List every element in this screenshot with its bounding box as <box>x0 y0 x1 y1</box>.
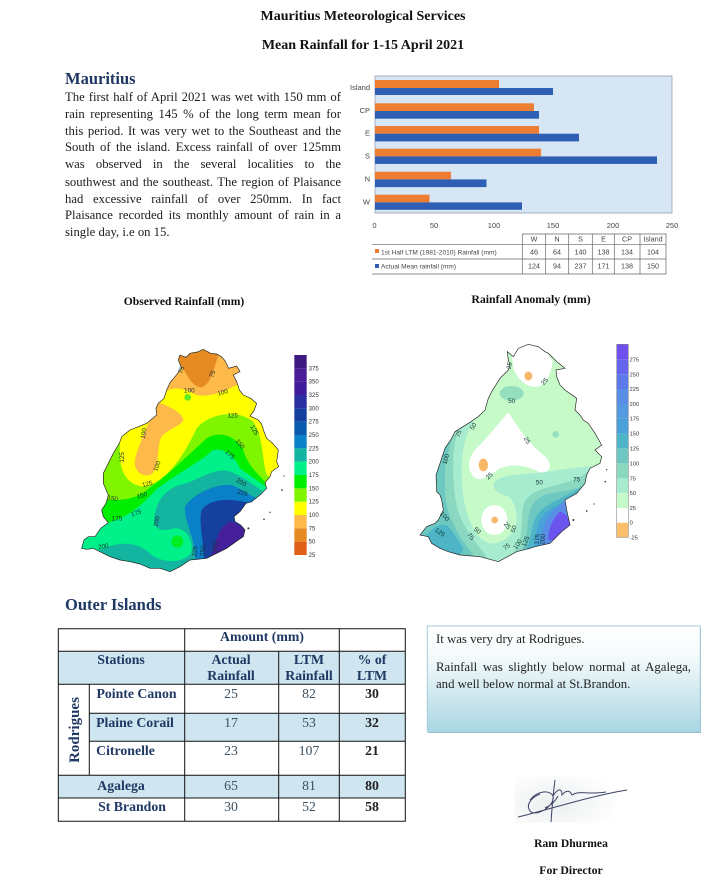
data table under bar chart: S <box>578 234 583 244</box>
contour labels: 125 <box>119 452 126 463</box>
row: Citronelle: 107 <box>299 743 319 758</box>
legend: anomaly colour bar: -25 <box>630 535 638 541</box>
contour labels: 100 <box>442 453 451 465</box>
legend: observed rainfall colour bar: 275 <box>309 420 319 426</box>
contour labels: 50 <box>536 479 543 486</box>
contour labels: 225 <box>237 489 249 498</box>
contour labels: 100 <box>152 460 163 472</box>
legend: anomaly colour bar: 250 <box>630 372 639 378</box>
text block: Mauritius summary: was observed in the several localities to the <box>65 157 341 171</box>
row: St Brandon: 58 <box>365 799 379 814</box>
value axis labels: 50 <box>430 221 438 230</box>
legend: observed rainfall colour bar: 225 <box>309 446 319 452</box>
contour labels: 75 <box>177 365 186 375</box>
row: Agalega: 80 <box>365 778 379 793</box>
row: Pointe Canon: 82 <box>302 686 316 701</box>
contour labels: 25 <box>506 361 514 370</box>
data table under bar chart: 124 <box>528 262 540 270</box>
data table under bar chart: E <box>601 234 606 244</box>
bars: W <box>375 195 522 210</box>
legend: anomaly colour bar: 150 <box>630 432 639 438</box>
contour labels: 75 <box>573 477 581 484</box>
bars: N <box>375 172 486 187</box>
data table under bar chart: 150 <box>647 262 659 270</box>
legend: anomaly colour bar: 100 <box>630 461 639 467</box>
row: Plaine Corail: 17 <box>224 715 238 730</box>
contour labels: 50 <box>510 524 519 534</box>
data table under bar chart: 171 <box>598 262 610 270</box>
value axis labels: 200 <box>607 221 619 230</box>
contour labels: 25 <box>540 376 550 387</box>
signature <box>515 775 627 823</box>
row: Citronelle: Citronelle <box>96 743 155 758</box>
text block: Mauritius summary: South of the island. Excess rainfall of over 125mm <box>65 140 341 154</box>
row: St Brandon: 52 <box>302 799 316 814</box>
contour labels: 250 <box>199 545 207 556</box>
contour labels: 25 <box>485 471 495 481</box>
column headers: Rainfall <box>285 668 333 683</box>
contour labels: 25 <box>502 521 512 531</box>
signatory role: For Director <box>539 863 603 877</box>
contour labels: 125 <box>227 412 238 419</box>
column headers: LTM <box>294 652 324 667</box>
contour labels: 75 <box>502 542 512 552</box>
contour labels: 200 <box>235 477 248 489</box>
bars: CP <box>375 103 539 119</box>
row: St Brandon <box>98 799 379 814</box>
row: Plaine Corail <box>96 715 379 730</box>
bars: E <box>375 126 579 141</box>
map: rainfall anomaly <box>420 335 607 575</box>
category axis labels: S <box>365 152 370 160</box>
data table under bar chart: Island <box>643 234 663 244</box>
title: organisation: Mauritius Meteorological Services <box>260 9 466 24</box>
legend: observed rainfall colour bar: 300 <box>309 406 319 412</box>
row: St Brandon: St Brandon <box>98 799 166 814</box>
data table under bar chart: 104 <box>647 248 659 256</box>
legend: observed rainfall colour bar: 100 <box>309 513 319 519</box>
contour labels: 150 <box>107 494 119 503</box>
row: Agalega: Agalega <box>97 778 145 793</box>
text block: outer islands summary <box>436 632 691 691</box>
text block: Mauritius summary: Plaisance recorded its monthly amount of rain in a <box>65 208 341 222</box>
category axis labels <box>350 83 371 206</box>
map: observed rainfall <box>80 340 287 580</box>
column headers <box>97 629 387 683</box>
row: St Brandon: 30 <box>224 799 238 814</box>
value axis labels: 100 <box>488 221 500 230</box>
legend: anomaly colour bar: 200 <box>630 402 639 408</box>
contour labels: 25 <box>522 436 532 446</box>
data table under bar chart: 138 <box>598 248 610 256</box>
data table under bar chart: 64 <box>553 248 561 256</box>
value axis labels: 150 <box>547 221 559 230</box>
legend: observed rainfall colour bar: 375 <box>309 366 319 372</box>
contour labels: 50 <box>472 526 482 536</box>
row: Pointe Canon: 30 <box>365 686 379 701</box>
contour labels: 150 <box>136 491 149 501</box>
data table under bar chart: 134 <box>621 248 633 256</box>
contour labels: 100 <box>140 427 149 439</box>
contour labels: 125 <box>141 480 154 489</box>
row: Agalega <box>97 778 379 793</box>
data table under bar chart <box>372 234 666 274</box>
legend: observed rainfall colour bar: 350 <box>309 380 319 386</box>
legend: observed rainfall colour bar: 125 <box>309 500 319 506</box>
contour labels: 125 <box>248 424 260 437</box>
data table under bar chart: W <box>531 234 538 244</box>
column headers: Rainfall <box>207 668 255 683</box>
category axis labels: E <box>365 128 370 138</box>
legend: observed rainfall colour bar: 150 <box>309 486 319 492</box>
contour labels: 75 <box>455 429 464 438</box>
contour labels: 200 <box>539 533 547 545</box>
legend: observed rainfall colour bar: 175 <box>309 473 319 479</box>
category axis labels: CP <box>360 106 370 115</box>
row: Citronelle: 21 <box>365 743 379 758</box>
value axis labels <box>372 221 678 230</box>
heading: Outer Islands: Outer Islands <box>65 595 162 614</box>
text block: Mauritius summary: rain representing 145 % of the long term mean for <box>65 107 341 121</box>
row: Plaine Corail: 32 <box>365 715 379 730</box>
contour labels <box>98 365 260 557</box>
row: Plaine Corail: Plaine Corail <box>96 715 174 730</box>
text block: Mauritius summary: southwest and the southeast. The region of Plaisance <box>65 175 341 189</box>
bars: Island <box>375 80 553 95</box>
contour labels: 225 <box>192 545 199 557</box>
text block: Mauritius summary <box>65 90 341 239</box>
contour labels: 50 <box>469 421 479 431</box>
contour labels: 175 <box>223 449 236 462</box>
text block: Mauritius summary: this period. It was very wet to the Southeast and the <box>65 124 341 138</box>
text block: Mauritius summary: had excessive rainfall of over 250mm. In fact <box>65 192 341 206</box>
data table under bar chart: 94 <box>553 262 561 270</box>
column headers: Amount (mm) <box>220 629 304 645</box>
data table under bar chart: 140 <box>574 248 586 256</box>
legend: observed rainfall colour bar <box>294 355 319 559</box>
value axis labels: 0 <box>372 221 377 230</box>
legend: anomaly colour bar: 125 <box>630 446 639 452</box>
column headers: % of <box>358 652 387 667</box>
column headers: Actual <box>211 652 251 667</box>
legend: anomaly colour bar: 25 <box>630 506 636 512</box>
heading: Mauritius: Mauritius <box>65 69 136 88</box>
legend: observed rainfall colour bar: 50 <box>309 540 316 546</box>
signatory name: Ram Dhurmea <box>534 837 608 850</box>
row: Pointe Canon: Pointe Canon <box>96 686 177 701</box>
column headers: LTM <box>357 668 387 683</box>
table: outer islands rainfall <box>58 629 405 821</box>
row: Agalega: 81 <box>302 778 316 793</box>
title: report period: Mean Rainfall for 1-15 April 2021 <box>262 38 464 53</box>
text block: Mauritius summary: single day, i.e on 15. <box>65 225 170 239</box>
callout box background <box>427 626 701 733</box>
column headers: Stations <box>97 652 145 667</box>
legend: anomaly colour bar: 50 <box>630 491 636 497</box>
legend: anomaly colour bar: 175 <box>630 417 639 423</box>
text block: outer islands summary: and well below normal at St.Brandon. <box>436 677 630 691</box>
text block: Mauritius summary: The first half of April 2021 was wet with 150 mm of <box>65 90 341 104</box>
contour labels: 175 <box>534 533 541 545</box>
row: Agalega: 65 <box>224 778 238 793</box>
contour labels: 125 <box>521 535 531 548</box>
value axis labels: 250 <box>666 221 678 230</box>
contour labels: 75 <box>465 532 476 542</box>
legend: anomaly colour bar: 0 <box>630 521 633 527</box>
contour labels: 100 <box>217 388 229 398</box>
heading: Observed Rainfall: Observed Rainfall (mm) <box>124 295 244 308</box>
contour labels: 275 <box>212 541 220 553</box>
row: Citronelle <box>96 743 379 758</box>
bar chart: rainfall by region <box>350 76 678 230</box>
contour labels: 75 <box>208 369 217 379</box>
row: Citronelle: 23 <box>224 743 238 758</box>
data table under bar chart: N <box>554 234 560 244</box>
row label: Rodrigues: Rodrigues <box>67 697 83 763</box>
legend: observed rainfall colour bar: 250 <box>309 433 319 439</box>
text block: outer islands summary: Rainfall was slightly below normal at Agalega, <box>436 660 691 674</box>
row: Pointe Canon <box>96 686 379 701</box>
row: Plaine Corail: 53 <box>302 715 316 730</box>
contour labels: 100 <box>512 538 524 551</box>
legend: observed rainfall colour bar: 325 <box>309 393 319 399</box>
contour labels <box>433 361 581 552</box>
data table under bar chart: CP <box>622 234 632 244</box>
category axis labels: Island <box>350 83 370 92</box>
contour labels: 100 <box>184 387 195 394</box>
data table under bar chart: 237 <box>574 262 586 270</box>
contour labels: 175 <box>112 516 123 523</box>
category axis labels: W <box>363 198 371 206</box>
legend: observed rainfall colour bar: 75 <box>309 526 316 532</box>
bars: S <box>375 149 657 164</box>
legend: anomaly colour bar <box>617 344 639 541</box>
data table under bar chart: 1st Half LTM (1981-2010) Rainfall (mm) <box>381 250 497 256</box>
contour labels: 175 <box>130 508 143 519</box>
contour labels: 200 <box>98 542 110 551</box>
legend: anomaly colour bar: 275 <box>630 357 639 363</box>
row: Pointe Canon: 25 <box>224 686 238 701</box>
contour labels: 200 <box>153 515 162 527</box>
legend: observed rainfall colour bar: 200 <box>309 460 319 466</box>
heading: Rainfall Anomaly: Rainfall Anomaly (mm) <box>471 292 591 306</box>
legend: anomaly colour bar: 225 <box>630 387 639 393</box>
category axis labels: N <box>365 174 370 184</box>
legend: anomaly colour bar: 75 <box>630 476 636 482</box>
contour labels: 125 <box>433 527 446 539</box>
text block: outer islands summary: It was very dry at Rodrigues. <box>436 632 585 646</box>
contour labels: 150 <box>234 438 246 451</box>
data table under bar chart: Actual Mean rainfall (mm) <box>381 264 456 270</box>
contour labels: 50 <box>508 398 516 405</box>
data table under bar chart: 138 <box>621 262 633 270</box>
legend: observed rainfall colour bar: 25 <box>309 553 316 559</box>
contour labels: 100 <box>438 510 451 523</box>
data table under bar chart: 46 <box>530 248 538 256</box>
